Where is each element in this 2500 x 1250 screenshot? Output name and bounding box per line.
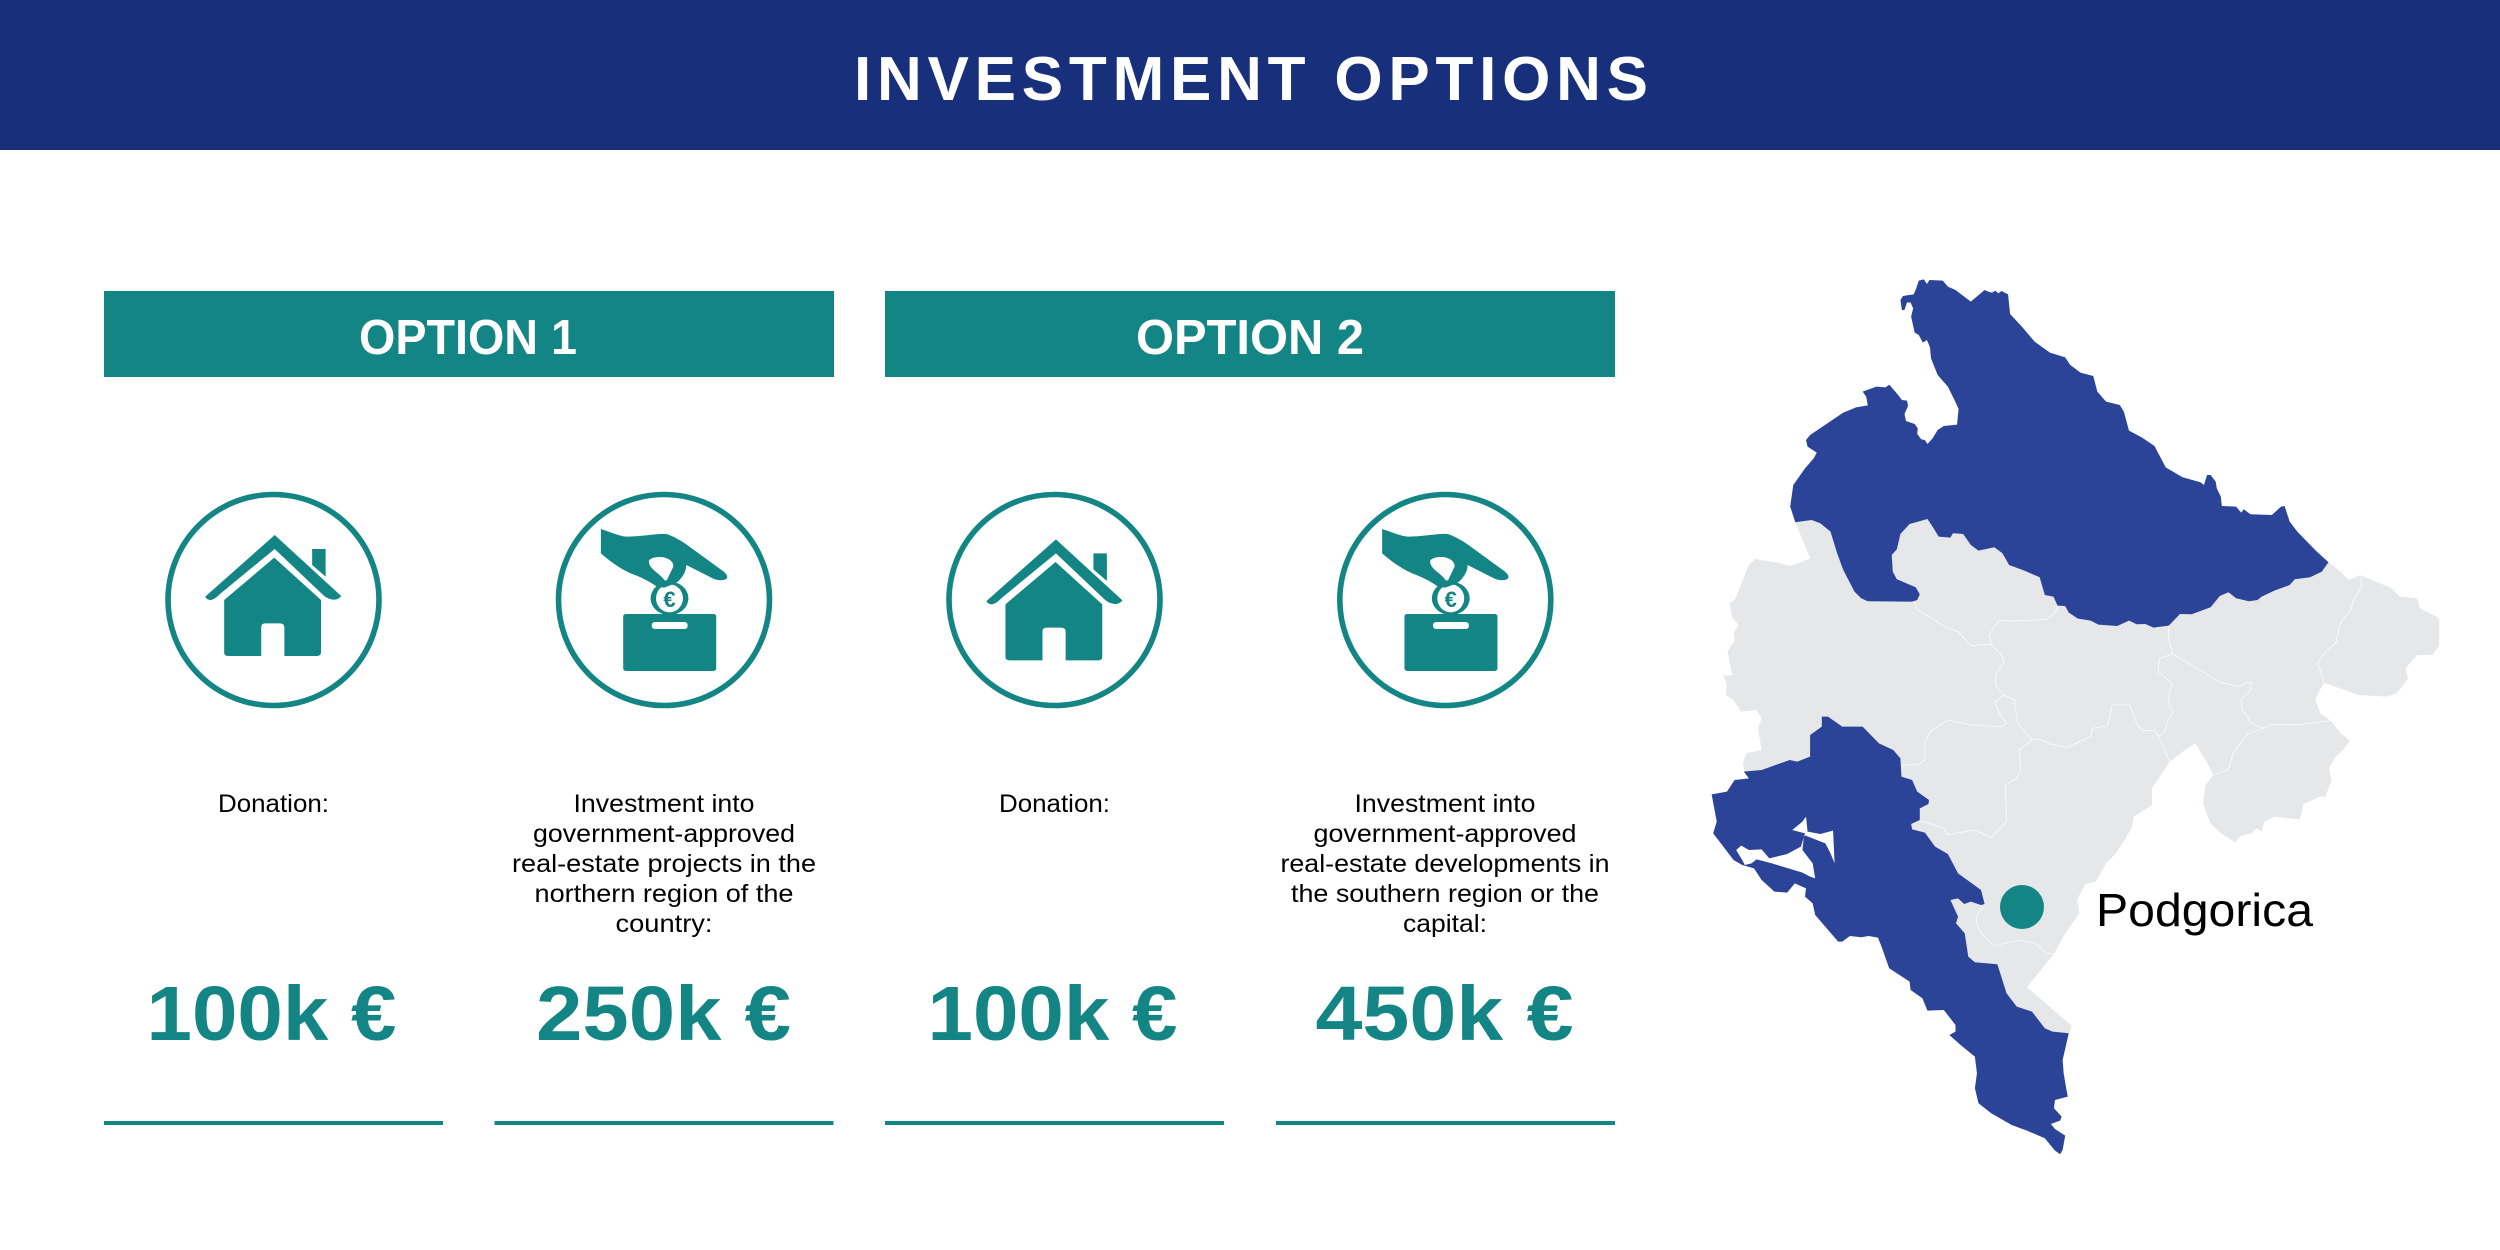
investment description: the southern region or the xyxy=(1291,880,1599,908)
icon: house xyxy=(168,494,379,706)
option 2 heading: OPTION 2 xyxy=(1136,311,1364,365)
icon: hand dropping euro coin into box: € xyxy=(663,587,676,612)
panel: option 2 xyxy=(885,291,1615,1125)
investment description: Investment into xyxy=(574,790,754,818)
amount: 450k € xyxy=(1316,971,1574,1057)
underline xyxy=(104,1121,443,1125)
column: donation 100k xyxy=(885,494,1224,1125)
icon: hand dropping euro coin into box xyxy=(1340,494,1551,706)
underline xyxy=(1276,1121,1615,1125)
title: INVESTMENT OPTIONS xyxy=(854,45,1648,114)
underline xyxy=(494,1121,834,1125)
column: investment 250k xyxy=(494,494,834,1125)
option 1 heading: OPTION 1 xyxy=(359,311,577,365)
map of Montenegro xyxy=(1712,279,2439,1154)
column: donation 100k xyxy=(104,494,443,1125)
investment description: capital: xyxy=(1403,910,1487,938)
amount: 100k € xyxy=(146,971,396,1057)
panel: option 1 xyxy=(104,291,834,1125)
investment description: northern region of the xyxy=(534,880,794,908)
Podgorica marker xyxy=(2000,885,2044,929)
map: northern region xyxy=(1790,279,2328,628)
icon: hand dropping euro coin into box xyxy=(558,494,770,706)
column: investment 450k xyxy=(1276,494,1615,1125)
option 2 heading xyxy=(885,291,1615,377)
amount: 100k € xyxy=(928,971,1178,1057)
icon: hand dropping euro coin into box: € xyxy=(1445,587,1457,612)
header band xyxy=(0,0,2500,150)
Podgorica label: Podgorica xyxy=(2096,884,2313,936)
investment description: real-estate projects in the xyxy=(512,850,816,878)
donation text: Donation: xyxy=(218,790,329,818)
investment description: Investment into xyxy=(1354,790,1536,818)
amount: 250k € xyxy=(536,971,791,1057)
investment description xyxy=(512,790,816,938)
map: grey central regions xyxy=(1723,513,2439,1037)
investment description: country: xyxy=(616,910,712,938)
underline xyxy=(885,1121,1224,1125)
map: southern coastal region xyxy=(1712,717,2069,1154)
donation text: Donation: xyxy=(999,790,1110,818)
investment description xyxy=(1280,790,1610,938)
investment description: government-approved xyxy=(533,820,795,848)
icon: house xyxy=(949,494,1160,706)
investment description: government-approved xyxy=(1314,820,1576,848)
option 1 heading xyxy=(104,291,834,377)
investment description: real-estate developments in xyxy=(1280,850,1610,878)
